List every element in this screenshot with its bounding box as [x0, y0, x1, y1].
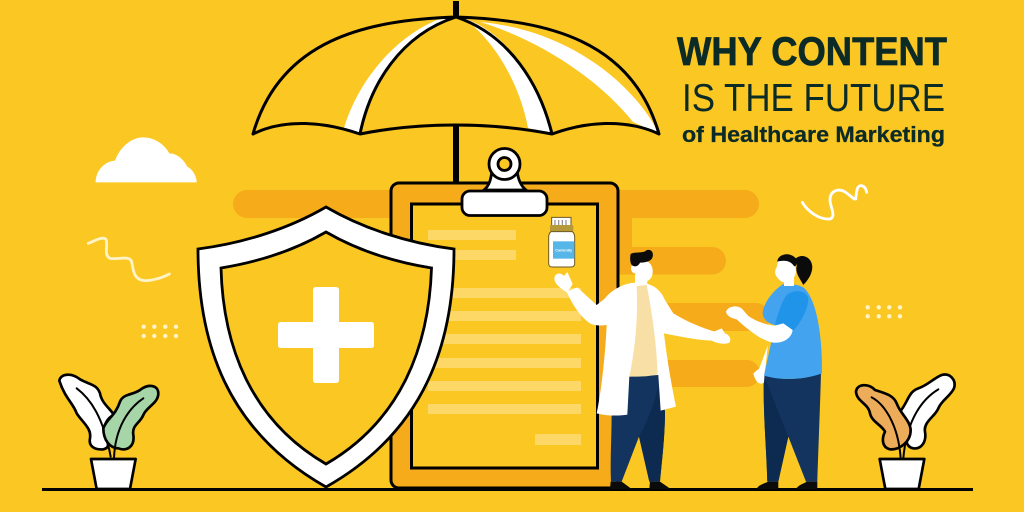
doctor trousers	[611, 373, 665, 482]
title line 2: IS THE FUTURE	[682, 77, 945, 120]
umbrella outline	[253, 17, 659, 134]
dots left	[142, 324, 178, 338]
patient shoes	[757, 482, 817, 489]
white leaf	[900, 375, 955, 448]
paper text lines	[428, 230, 581, 445]
orange leaf	[856, 385, 911, 449]
clipboard clip	[462, 148, 547, 216]
background stripes	[233, 190, 770, 387]
patient neck and face	[775, 260, 796, 286]
leaf vein green	[114, 398, 143, 458]
umbrella pole	[453, 1, 459, 183]
leaf vein white	[77, 388, 111, 457]
umbrella canopy	[253, 17, 659, 134]
patient hair	[777, 254, 812, 285]
icon: cloud	[96, 137, 197, 182]
shield	[198, 207, 454, 487]
clipboard paper	[412, 204, 598, 468]
bottle label	[553, 241, 574, 259]
figure: doctor	[554, 250, 730, 489]
patient back arm	[753, 345, 768, 384]
title	[677, 30, 947, 147]
title line 1: WHY CONTENT	[677, 30, 947, 74]
bottle label text: Contently	[555, 248, 573, 252]
umbrella	[253, 1, 659, 183]
plant left	[59, 375, 158, 489]
doctor left hand	[554, 272, 573, 293]
doctor shoes	[610, 482, 671, 489]
doctor shirt	[629, 285, 658, 377]
doctor lab coat	[567, 283, 715, 416]
title line 3: of Healthcare Marketing	[682, 122, 945, 147]
doctor right hand	[712, 328, 730, 344]
patient shirt	[763, 284, 822, 379]
patient front arm	[726, 306, 793, 343]
pot	[91, 459, 136, 489]
plant right	[856, 375, 955, 489]
shield outer	[198, 207, 454, 487]
squiggle right	[802, 186, 867, 219]
bottle cap	[552, 217, 571, 226]
bottle body	[549, 232, 575, 267]
dots right	[866, 305, 902, 318]
doctor neck and face	[631, 260, 653, 286]
trouser shading	[639, 387, 665, 482]
leaf vein orange	[872, 397, 901, 458]
doctor hair	[630, 250, 653, 266]
white leaf	[59, 375, 114, 449]
leaf vein white	[903, 389, 938, 458]
shield inner	[221, 232, 432, 464]
umbrella white panels	[344, 17, 659, 134]
pot	[880, 459, 924, 489]
medical cross	[278, 287, 374, 383]
ground line	[42, 488, 973, 491]
figure: patient	[726, 254, 822, 489]
clipboard	[391, 148, 618, 488]
patient sleeve	[775, 291, 808, 331]
squiggle left	[88, 238, 169, 281]
trouser shading	[764, 376, 788, 482]
bottle band	[550, 225, 573, 232]
pill bottle	[549, 217, 575, 267]
patient trousers	[764, 373, 821, 482]
clipboard board	[391, 183, 618, 488]
green leaf	[103, 386, 158, 449]
